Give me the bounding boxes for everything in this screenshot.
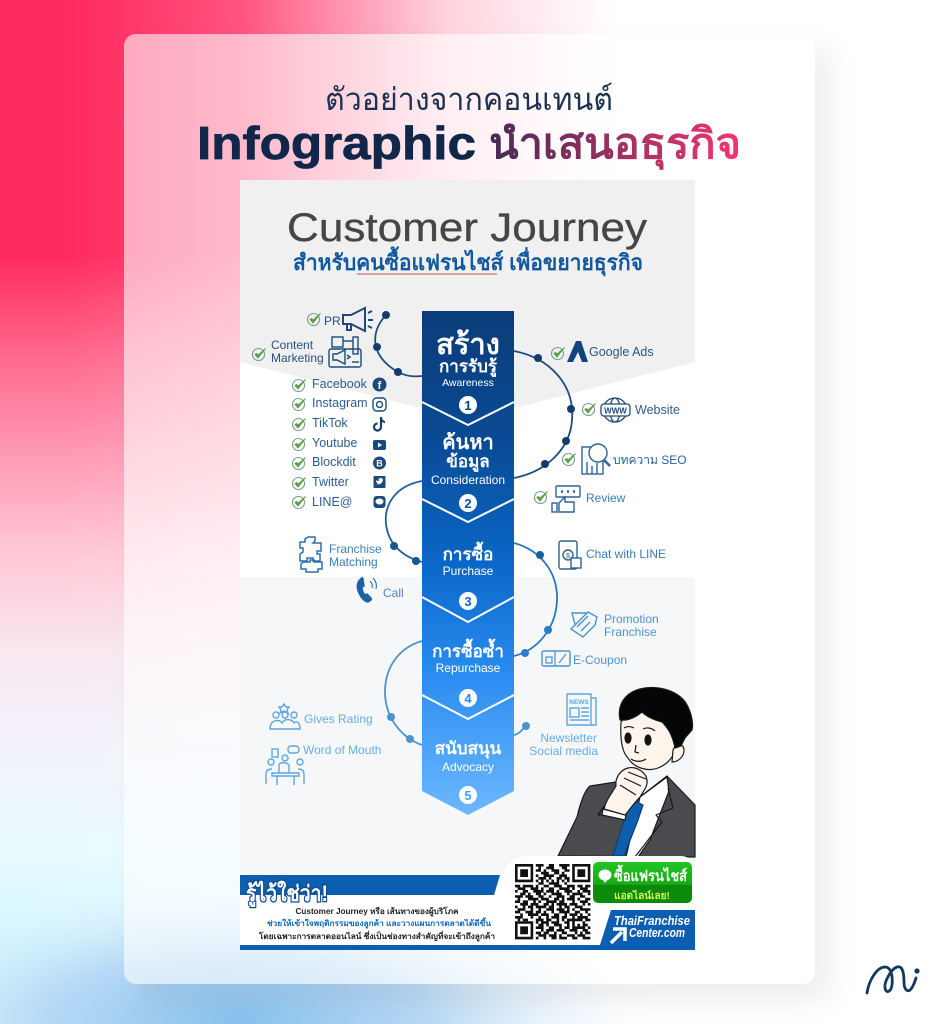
logo: ThaiFranchise Center.com: ThaiFranchise [614, 914, 690, 928]
Blockdit row: Blockdit [312, 455, 356, 469]
QR code [515, 864, 590, 939]
hand [604, 768, 647, 815]
button: buy franchise add LINE: แอดไลน์เลย! [614, 889, 670, 902]
neck and face [621, 700, 682, 770]
stage 2 consideration: Consideration [431, 473, 505, 487]
heading: main title [197, 117, 741, 170]
item: Franchise Matching: Franchise [329, 542, 382, 556]
item: Word of Mouth [266, 743, 381, 785]
Instagram row: Instagram [312, 396, 368, 410]
stage 1 awareness: 1 [464, 398, 472, 413]
panel: translucent card [124, 34, 815, 984]
item: Chat with LINE [559, 541, 666, 569]
stage 2 consideration: 2 [464, 496, 472, 511]
stage 5 advocacy: 5 [464, 788, 472, 803]
item: Review [534, 486, 626, 512]
item: Google Ads: Google Ads [589, 345, 654, 359]
eyes [625, 733, 651, 745]
stage 4 repurchase [432, 638, 504, 707]
item: Call: Call [383, 586, 404, 600]
Facebook row: Facebook [312, 377, 368, 391]
item: PR: PR [324, 314, 341, 328]
TikTok row: TikTok [312, 416, 348, 430]
hair [619, 688, 692, 748]
illustration: businessman [558, 688, 695, 857]
LINE@ row: LINE@ [312, 495, 352, 509]
tie [613, 800, 643, 856]
item: PR [308, 308, 373, 331]
did-you-know line 1: Customer Journey หรือ เส้นทางของผู้บริโภค [296, 906, 458, 917]
Facebook row [292, 377, 386, 392]
button: buy franchise add LINE: ซื้อแฟรนไชส์ [614, 864, 688, 885]
Twitter row: Twitter [312, 475, 349, 489]
stage 1 awareness: การรับรู้ [439, 357, 498, 378]
stage 1 awareness: สร้าง [436, 329, 500, 361]
panel: poster [240, 180, 696, 950]
connector curves with dots [373, 311, 575, 745]
item: Newsletter Social media: NEWS [569, 699, 589, 706]
item: Newsletter Social media [529, 694, 598, 758]
central journey arrow [422, 311, 514, 815]
item: Website [582, 398, 680, 422]
item: content marketing [252, 337, 361, 367]
did-you-know line 2: ช่วยให้เข้าใจพฤติกรรมของลูกค้า และวางแผนการตลาดได้ดีขึ้น [267, 917, 492, 929]
LINE icon [598, 870, 612, 883]
stage 5 advocacy: สนับสนุน [435, 739, 502, 759]
item: Promotion Franchise: Promotion [604, 612, 659, 626]
stage 3 purchase: 3 [464, 594, 472, 609]
item: Newsletter Social media: Social media [529, 744, 598, 758]
stage 3 purchase: การซื้อ [443, 541, 493, 564]
item: Website: Website [635, 403, 680, 417]
list: social channels [292, 377, 386, 509]
ear [672, 745, 684, 762]
item: Newsletter Social media: Newsletter [540, 731, 597, 745]
item: Gives Rating: Gives Rating [304, 712, 373, 726]
brand logo mark [867, 967, 918, 993]
stage 4 repurchase: Repurchase [436, 661, 501, 675]
stage 1 awareness [436, 329, 500, 414]
stage 2 consideration: ค้นหา [442, 431, 494, 454]
stage 5 advocacy: Advocacy [442, 760, 494, 774]
did-you-know line 3: โดยเฉพาะการตลาดออนไลน์ ซึ่งเป็นช่องทางสำคัญที่จะเข้าถึงลูกค้า [258, 930, 495, 942]
stage 3 purchase: Purchase [443, 564, 494, 578]
item: E-Coupon: E-Coupon [573, 653, 627, 667]
item: Promotion Franchise: Franchise [604, 625, 657, 639]
Blockdit row [292, 455, 386, 470]
shirt [626, 777, 669, 857]
stage 4 repurchase: การซื้อซ้ำ [432, 638, 504, 661]
stage 4 repurchase: 4 [464, 691, 472, 706]
item: Call [357, 578, 404, 602]
heading: subtitle: ตัวอย่างจากคอนเทนต์ [325, 82, 613, 117]
item: Word of Mouth: Word of Mouth [303, 743, 381, 757]
jacket lapel lines [598, 788, 673, 857]
shirt cuff [602, 809, 626, 820]
Blockdit row: B [376, 458, 383, 468]
item: SEO article [562, 444, 687, 474]
heading: main title: นำเสนอธุรกิจ [489, 120, 741, 170]
item: Chat with LINE: $ [566, 553, 570, 560]
heading: main title: Infographic [197, 117, 476, 169]
item: E-Coupon [542, 651, 627, 667]
logo: ThaiFranchise Center.com [600, 910, 695, 945]
stage 2 consideration [431, 431, 505, 512]
panel: did-you-know banner [240, 875, 696, 950]
brows nose mouth [624, 726, 655, 761]
poster subtitle: สำหรับคนซื้อแฟรนไชส์ เพื่อขยายธุรกิจ [293, 246, 643, 277]
item: Website: WWW [604, 406, 627, 416]
Youtube row: Youtube [312, 436, 357, 450]
logo: ThaiFranchise Center.com: Center.com [629, 926, 685, 940]
item: Review: Review [586, 491, 626, 505]
item: SEO article: บทความ SEO [613, 453, 687, 467]
item: Franchise Matching [300, 537, 382, 572]
jacket [558, 776, 695, 857]
item: Gives Rating [270, 704, 373, 729]
stage 5 advocacy [435, 739, 502, 804]
poster title: Customer Journey [287, 206, 647, 250]
item: Google Ads [552, 341, 654, 362]
stage 1 awareness: Awareness [442, 377, 494, 389]
stage 3 purchase [443, 541, 494, 610]
item: Promotion Franchise [571, 612, 659, 639]
button: buy franchise add LINE [593, 862, 692, 903]
item: Chat with LINE: Chat with LINE [586, 547, 666, 561]
panel: white contact tab [500, 856, 695, 945]
item: Franchise Matching: Matching [329, 555, 378, 569]
Facebook row: f [378, 380, 382, 392]
item: content marketing: Content [271, 338, 314, 352]
did-you-know heading: รู้ไว้ใช่ว่า! [246, 880, 328, 908]
stage 2 consideration: ข้อมูล [446, 452, 490, 473]
item: content marketing: Marketing [271, 351, 324, 365]
